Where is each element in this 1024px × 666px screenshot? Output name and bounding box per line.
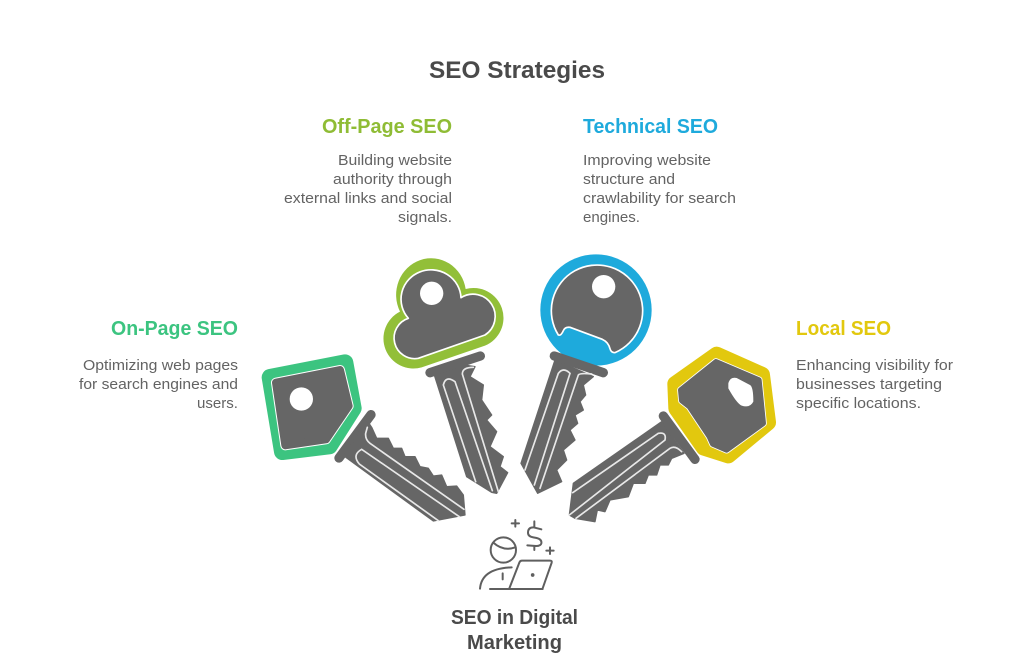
- description: off-page seo: external links and social: [284, 191, 452, 207]
- description: off-page seo: [284, 153, 452, 226]
- panel: on-page seo text: [79, 318, 238, 412]
- description: local seo: [796, 358, 953, 412]
- label: seo in digital marketing: [451, 607, 578, 654]
- description: technical seo: structure and: [583, 172, 675, 188]
- icon: blue technical key: [521, 254, 652, 493]
- description: technical seo: crawlability for search: [583, 191, 736, 207]
- description: technical seo: engines.: [583, 210, 640, 226]
- description: technical seo: Improving website: [583, 153, 711, 169]
- title: SEO Strategies: [429, 57, 605, 84]
- description: technical seo: [583, 153, 736, 226]
- heading: off-page seo: Off-Page SEO: [322, 116, 452, 138]
- panel: technical seo text: [583, 116, 736, 226]
- panel: local seo text: [796, 318, 953, 412]
- label: seo in digital marketing: Marketing: [467, 632, 562, 654]
- description: on-page seo: for search engines and: [79, 377, 238, 393]
- heading: technical seo: Technical SEO: [583, 116, 718, 138]
- heading: on-page seo: On-Page SEO: [111, 318, 238, 340]
- icon: yellow local key: [569, 355, 768, 522]
- icon: person at laptop with dollar sign: [480, 520, 554, 589]
- description: local seo: businesses targeting: [796, 377, 942, 393]
- panel: off-page seo text: [284, 116, 452, 226]
- description: local seo: Enhancing visibility for: [796, 358, 953, 374]
- description: on-page seo: users.: [197, 396, 238, 412]
- description: on-page seo: Optimizing web pages: [83, 358, 238, 374]
- label: seo in digital marketing: SEO in Digital: [451, 607, 578, 629]
- icon: green on-page key: [270, 363, 465, 521]
- description: local seo: specific locations.: [796, 396, 921, 412]
- heading: local seo: Local SEO: [796, 318, 891, 340]
- description: off-page seo: authority through: [333, 172, 452, 188]
- description: off-page seo: Building website: [338, 153, 452, 169]
- description: on-page seo: [79, 358, 238, 412]
- icon: lime off-page key: [383, 258, 508, 493]
- description: off-page seo: signals.: [398, 210, 452, 226]
